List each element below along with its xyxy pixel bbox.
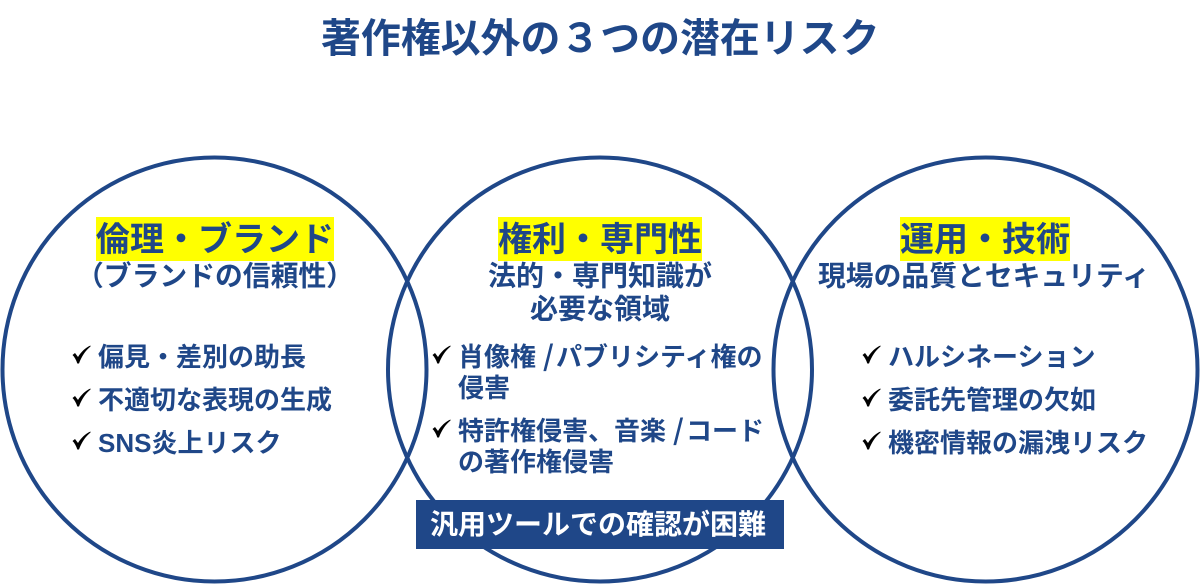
subheading: 法的・専門知識が: [488, 260, 712, 292]
heading highlight: [96, 217, 334, 261]
list: の著作権侵害: [458, 447, 614, 477]
panel: ethics and brand: [72, 217, 354, 458]
title: 著作権以外の３つの潜在リスク: [321, 17, 879, 61]
heading: 倫理・ブランド: [96, 220, 334, 259]
heading highlight: [498, 217, 702, 261]
list: 特許権侵害、音楽: [458, 416, 666, 446]
list: [72, 342, 332, 458]
list: [862, 342, 1148, 458]
list: SNS炎上リスク: [98, 428, 281, 458]
list: /: [673, 409, 684, 449]
list: 機密情報の漏洩リスク: [888, 428, 1148, 458]
circle: middle: [388, 158, 812, 582]
list: 偏見・差別の助長: [98, 342, 306, 372]
subheading: 現場の品質とセキュリティ: [818, 260, 1150, 292]
list: /: [543, 335, 554, 375]
circle: left: [2, 158, 426, 582]
circle: right: [774, 158, 1198, 582]
list: 委託先管理の欠如: [888, 385, 1096, 415]
subheading: 必要な領域: [530, 294, 670, 324]
heading: 権利・専門性: [498, 221, 702, 259]
list: ハルシネーション: [888, 342, 1095, 372]
list: [432, 335, 764, 477]
list: パブリシティ権の: [556, 342, 762, 372]
subheading: （ブランドの信頼性）: [76, 260, 354, 292]
callout banner: 汎用ツールでの確認が困難: [430, 508, 766, 540]
heading highlight: [900, 217, 1070, 261]
panel: rights and expertise: [432, 217, 764, 477]
list: コード: [686, 416, 764, 446]
subheading: [488, 260, 712, 324]
callout banner: [416, 500, 784, 549]
list: 侵害: [458, 373, 510, 403]
list: 不適切な表現の生成: [98, 385, 332, 415]
panel: operations and technology: [818, 217, 1150, 458]
heading: 運用・技術: [900, 221, 1070, 259]
list: 肖像権: [458, 342, 536, 372]
